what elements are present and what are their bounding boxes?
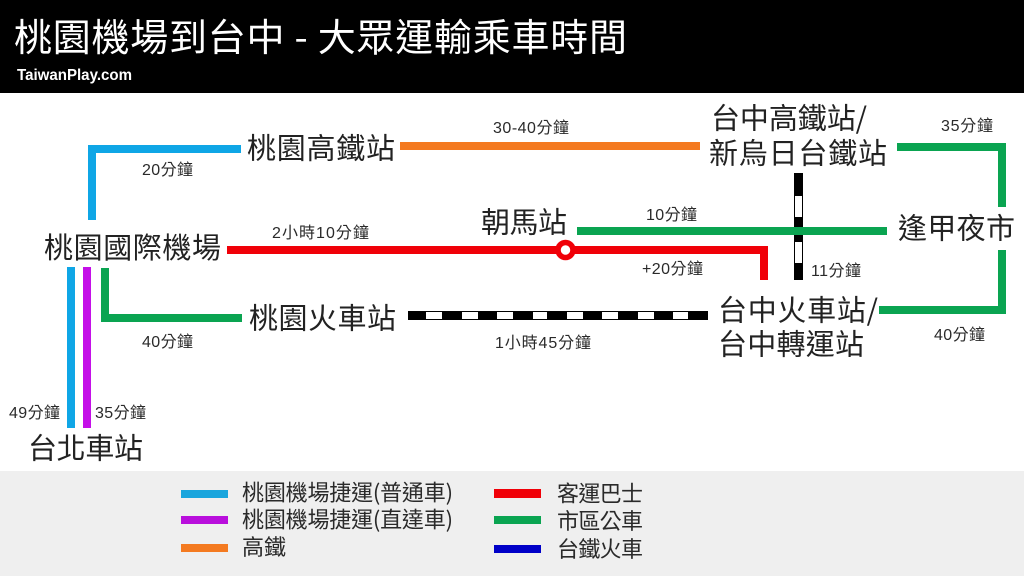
station: Taipei main: 台北車站	[28, 426, 143, 468]
station: Taichung HSR / Xinwuri: 台中高鐵站/	[711, 96, 867, 138]
time: 35 min: 35分鐘	[95, 404, 146, 422]
legend panel	[0, 471, 1024, 576]
time: 10 min: 10分鐘	[646, 206, 697, 224]
time: 11 min: 11分鐘	[811, 262, 861, 280]
route: Chaoma to Fengjia (bus)	[577, 227, 887, 235]
station: Chaoma: 朝馬站	[481, 200, 567, 242]
station: Taichung HSR / Xinwuri: 新烏日台鐵站	[709, 130, 887, 172]
station marker: Chaoma	[558, 242, 573, 258]
legend: HSR	[181, 530, 286, 562]
legend: city bus: 市區公車	[557, 504, 643, 536]
time: 40 min from Fengjia: 40分鐘	[934, 326, 985, 344]
route: Taoyuan to Taichung rail	[408, 311, 708, 320]
station: Taichung railway / transfer: 台中火車站/	[718, 288, 878, 330]
legend: city bus	[494, 504, 643, 536]
legend: commuter metro: 桃園機場捷運(普通車)	[242, 476, 453, 508]
station: Fengjia night market: 逢甲夜市	[898, 206, 1015, 248]
time: 35 min to Fengjia: 35分鐘	[941, 117, 993, 135]
route: Taichung station rail link	[794, 173, 803, 280]
site name: TaiwanPlay.com	[17, 67, 132, 84]
station: Taichung HSR / Xinwuri	[709, 96, 887, 172]
station: Taichung railway / transfer	[718, 288, 878, 364]
time: 40 min to Taoyuan station: 40分鐘	[142, 333, 193, 351]
title: 桃園機場到台中 - 大眾運輸乘車時間	[14, 7, 627, 62]
time: 30-40 min: 30-40分鐘	[493, 119, 569, 137]
legend: TRA rail	[494, 532, 643, 564]
route: Taichung station to Fengjia (bus)	[879, 250, 1002, 310]
route: airport to Taoyuan HSR (metro)	[92, 149, 241, 220]
route: airport to Taipei (express metro)	[83, 267, 91, 428]
route: airport to Taoyuan station (bus)	[105, 268, 242, 318]
legend: HSR: 高鐵	[242, 530, 286, 562]
station: Taichung railway / transfer: 台中轉運站	[718, 322, 864, 364]
route: Taichung HSR to Fengjia (bus)	[897, 147, 1002, 207]
route: HSR Taoyuan to Taichung	[400, 142, 700, 150]
station: Taoyuan airport: 桃園國際機場	[44, 225, 221, 267]
time: 2h10: 2小時10分鐘	[272, 224, 369, 242]
legend: express metro: 桃園機場捷運(直達車)	[242, 502, 453, 534]
time: 1h45: 1小時45分鐘	[495, 334, 591, 352]
legend: coach	[494, 476, 643, 508]
time: 49 min: 49分鐘	[9, 404, 60, 422]
station: Taoyuan HSR: 桃園高鐵站	[247, 126, 395, 168]
header band	[0, 0, 1024, 93]
station: Taoyuan railway: 桃園火車站	[249, 296, 396, 338]
legend: TRA rail: 台鐵火車	[557, 532, 643, 564]
time: +20 min: +20分鐘	[642, 260, 703, 278]
time: 20 min: 20分鐘	[142, 161, 193, 179]
route: airport to Taipei (commuter metro)	[67, 267, 75, 428]
route: airport to Taichung station (coach)	[227, 250, 764, 280]
legend: coach: 客運巴士	[557, 476, 643, 508]
